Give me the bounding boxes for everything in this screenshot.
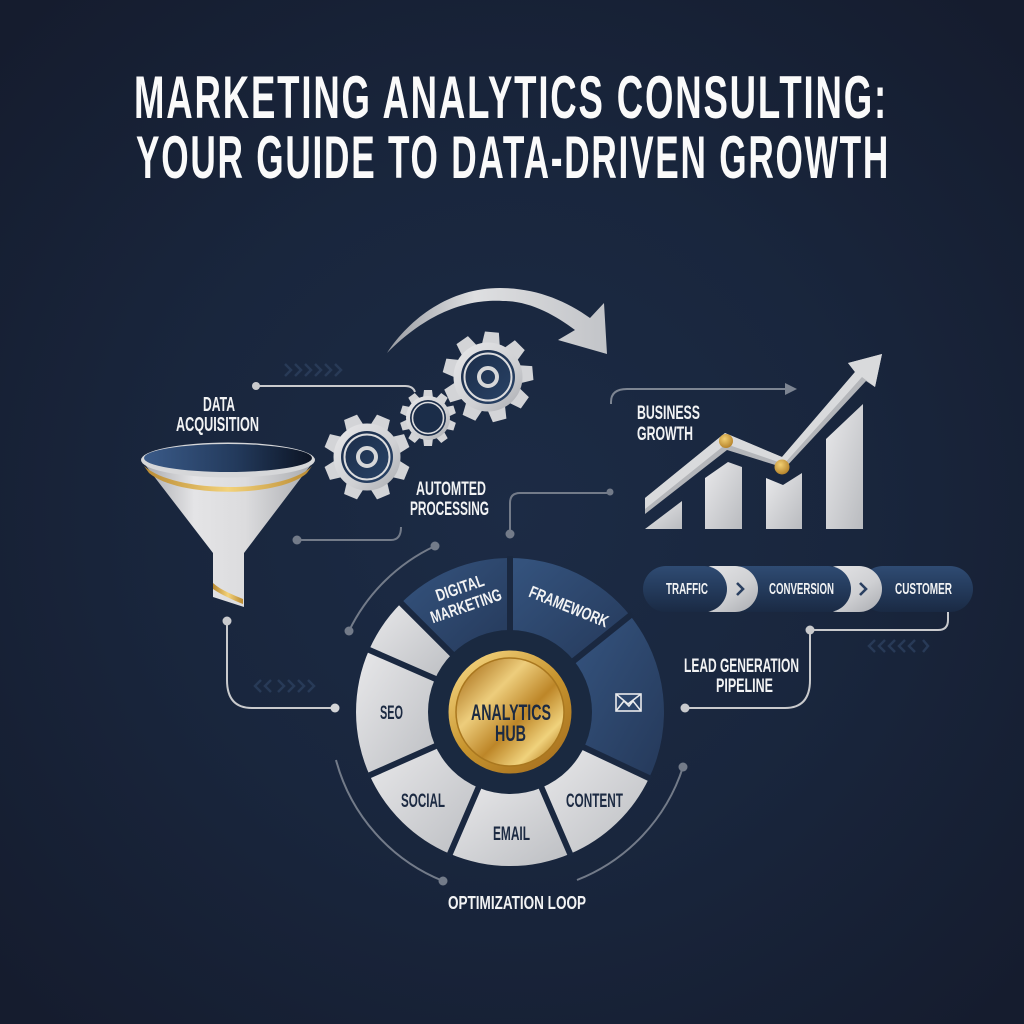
label: lead generation pipeline: LEAD GENERATION [684, 656, 799, 677]
pipeline: traffic, conversion, customer [643, 566, 973, 612]
hub dark ring [428, 630, 592, 794]
label: content: CONTENT [566, 791, 623, 812]
chevrons: under pipeline [869, 640, 928, 652]
label: optimization loop: OPTIMIZATION LOOP [448, 893, 586, 913]
title [134, 64, 890, 191]
connector: pipeline to lead generation [680, 612, 948, 712]
wheel separators [367, 556, 651, 856]
label: lead generation pipeline: PIPELINE [716, 676, 773, 697]
label: business growth: GROWTH [637, 424, 693, 445]
arrow: curved process swoosh [387, 288, 607, 354]
label: automated processing: PROCESSING [410, 499, 489, 520]
segment: content [541, 746, 649, 854]
connector: funnel to SEO [222, 616, 340, 712]
segment: email [450, 786, 570, 866]
chart: growth bars and arrow [645, 354, 882, 529]
label: data acquisition [176, 394, 259, 436]
analytics hub badge: HUB [495, 721, 526, 746]
pipeline: traffic, conversion, customer: CUSTOMER [895, 581, 952, 598]
chevrons: top left [285, 364, 341, 376]
icon: gear large [442, 331, 534, 423]
connector: data acquisition to gears [252, 382, 415, 392]
icon: gear left [324, 414, 410, 500]
label: email: EMAIL [493, 824, 530, 845]
label: automated processing: AUTOMTED [416, 479, 486, 500]
label: lead generation pipeline [684, 656, 799, 697]
optimization loop arcs [336, 542, 688, 886]
icon: envelope [616, 694, 641, 711]
segment: envelope [572, 616, 664, 778]
label: automated processing [410, 479, 489, 520]
segment: digital marketing [401, 558, 510, 655]
icon: gear small [400, 390, 456, 446]
wheel [356, 556, 664, 866]
arrow: toward growth chart [611, 383, 797, 404]
label: data acquisition: DATA [203, 394, 235, 416]
connector: framework to growth [506, 488, 614, 538]
analytics hub badge: ANALYTICS [471, 700, 551, 725]
label: digital marketing [422, 567, 504, 627]
segment: blank [369, 603, 453, 680]
label: digital marketing: MARKETING [428, 585, 504, 627]
label: social: SOCIAL [401, 791, 445, 812]
segment: social [370, 745, 479, 854]
segment: framework [510, 558, 630, 662]
label: framework: FRAMEWORK [526, 582, 612, 632]
label: business growth: BUSINESS [637, 403, 700, 424]
label: seo: SEO [380, 703, 403, 724]
label: digital marketing: DIGITAL [433, 571, 487, 605]
connector: processing [292, 527, 401, 544]
label: data acquisition: ACQUISITION [176, 414, 259, 436]
pipeline: traffic, conversion, customer: CONVERSION [769, 581, 834, 598]
pipeline: traffic, conversion, customer: TRAFFIC [666, 581, 708, 598]
chevrons: left of wheel [255, 680, 314, 692]
label: business growth [637, 403, 700, 445]
icon: funnel [141, 442, 315, 607]
segment: seo [356, 649, 437, 776]
analytics hub badge [448, 650, 572, 774]
